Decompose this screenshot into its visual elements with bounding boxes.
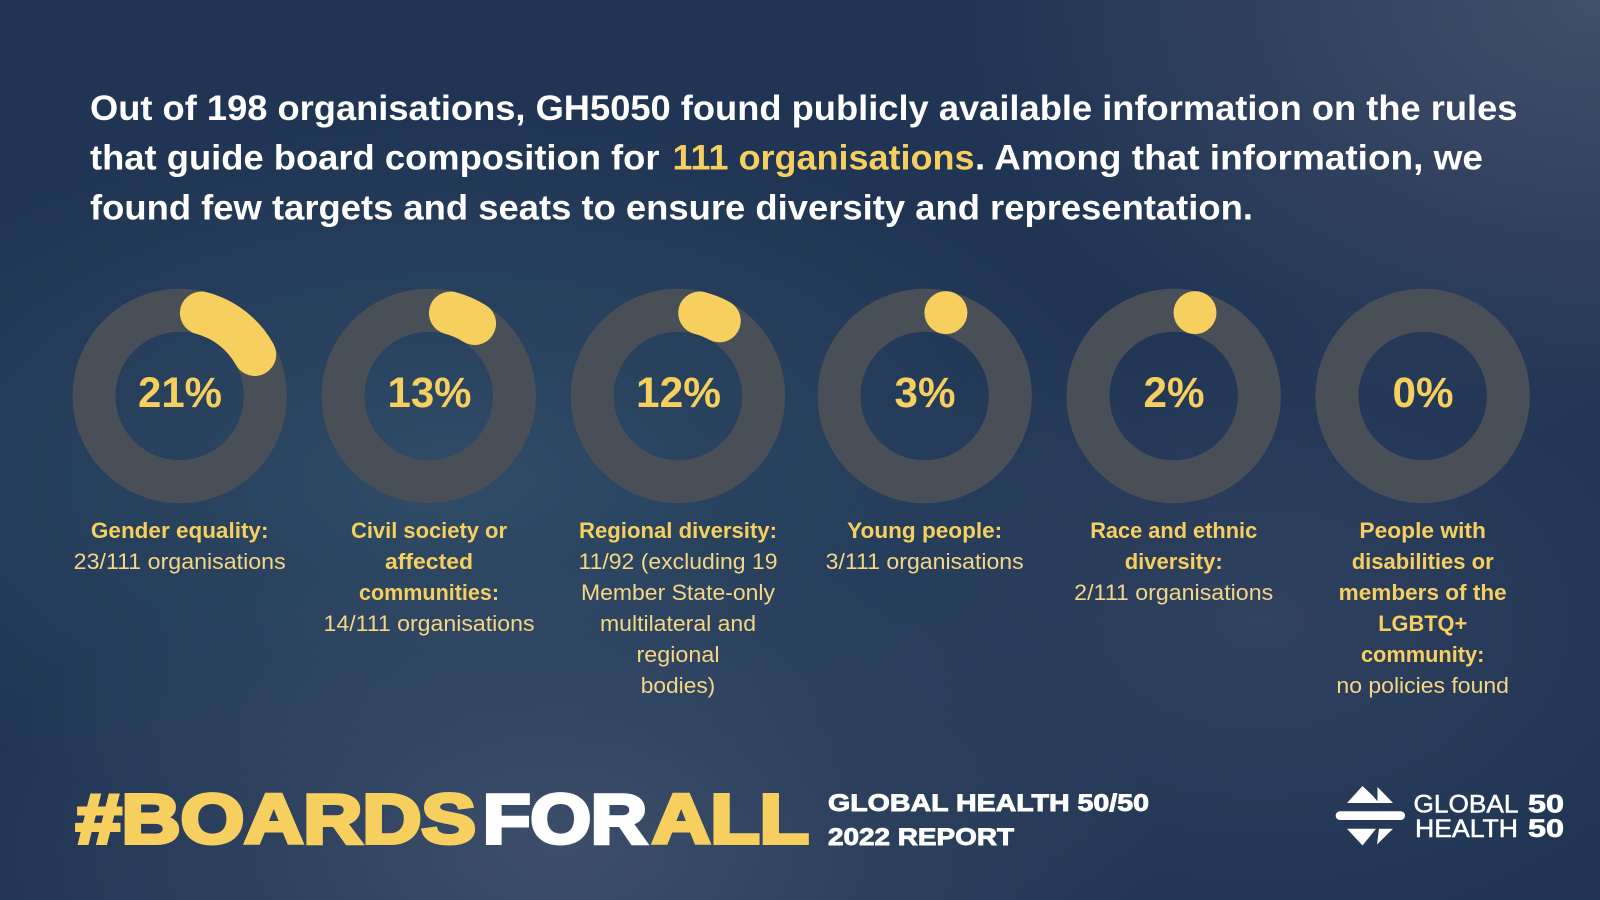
label: disabilities or LGBTQ+: no policies found [1336,673,1509,698]
label: regional diversity: regional [636,642,720,667]
label: disabilities or LGBTQ+: LGBTQ+ [1378,611,1467,636]
label: disabilities or LGBTQ+: People with [1359,518,1486,543]
label: gender equality: 23/111 organisations [74,549,286,574]
label: gender equality: Gender equality: [91,518,268,543]
donut chart: 12%: 12% [636,369,721,417]
panel: race and ethnic diversity [1074,291,1273,605]
donut chart: 0% [1337,310,1508,482]
logo wordmark: HEALTH [1415,815,1518,843]
donut chart: 0%: 0% [1392,369,1454,417]
label: disabilities or LGBTQ+: community: [1361,642,1484,667]
donut chart: 3%: 3% [894,369,956,417]
donut chart: 21% [94,310,265,482]
label: civil society: communities: [359,580,499,605]
hashtag: #BOARDSFORALL [76,780,809,858]
label: disabilities or LGBTQ+: disabilities or [1352,549,1494,574]
panel: regional diversity [578,310,778,698]
hashtag: #BOARDSFORALL: FOR [483,780,647,858]
logo wordmark: 50 [1528,815,1564,843]
panel: young people [826,291,1024,574]
report credit [828,790,1149,851]
label: disabilities or LGBTQ+ [1336,518,1509,698]
panel: gender equality [74,310,286,574]
headline: . Among that information, we [975,138,1483,178]
logo wordmark: GLOBAL [1414,790,1519,818]
report credit: GLOBAL HEALTH 50/50 [828,790,1149,817]
label: regional diversity: Member State-only [581,580,775,605]
donut chart: 2%: 2% [1144,369,1204,417]
headline [90,89,1518,228]
label: race and ethnic diversity: Race and ethnic [1090,518,1257,543]
label: gender equality [74,518,286,574]
headline: that guide board composition for [90,138,660,178]
label: regional diversity: bodies) [641,673,715,698]
label: race and ethnic diversity: 2/111 organisations [1074,580,1273,605]
label: disabilities or LGBTQ+: members of the [1339,580,1507,605]
panel: disabilities or LGBTQ+ [1336,310,1509,698]
label: regional diversity [578,518,778,698]
label: race and ethnic diversity [1074,518,1273,605]
logo wordmark [1414,790,1564,843]
label: young people [826,518,1024,574]
label: race and ethnic diversity: diversity: [1125,549,1223,574]
label: young people: Young people: [847,518,1002,543]
donut chart: 13%: 13% [388,369,472,417]
label: civil society [324,518,534,636]
donut chart: 12% [592,310,764,482]
label: civil society: affected [385,549,473,574]
hashtag: #BOARDSFORALL: #BOARDS [76,780,476,858]
label: civil society: Civil society or [351,518,507,543]
label: young people: 3/111 organisations [826,549,1024,574]
report credit: 2022 REPORT [828,824,1014,851]
donut chart: 3% [839,291,1010,482]
label: regional diversity: 11/92 (excluding 19 [578,549,778,574]
donut chart: 2% [1088,291,1259,482]
label: civil society: 14/111 organisations [324,611,534,636]
donut chart: 21%: 21% [138,369,222,417]
logo: Global Health 50/50 [1336,786,1564,846]
headline: found few targets and seats to ensure diversity and representation. [90,188,1253,228]
donut chart: 13% [343,310,514,482]
logo wordmark: 50 [1528,790,1564,818]
hashtag: #BOARDSFORALL: ALL [652,780,809,858]
headline: 111 organisations [672,138,974,178]
icon: mirrored triangles and bar [1336,786,1405,846]
headline: Out of 198 organisations, GH5050 found publicly available information on the rules [90,89,1518,128]
panel: civil society [324,310,534,636]
label: regional diversity: multilateral and [600,611,756,636]
label: regional diversity: Regional diversity: [579,518,777,543]
